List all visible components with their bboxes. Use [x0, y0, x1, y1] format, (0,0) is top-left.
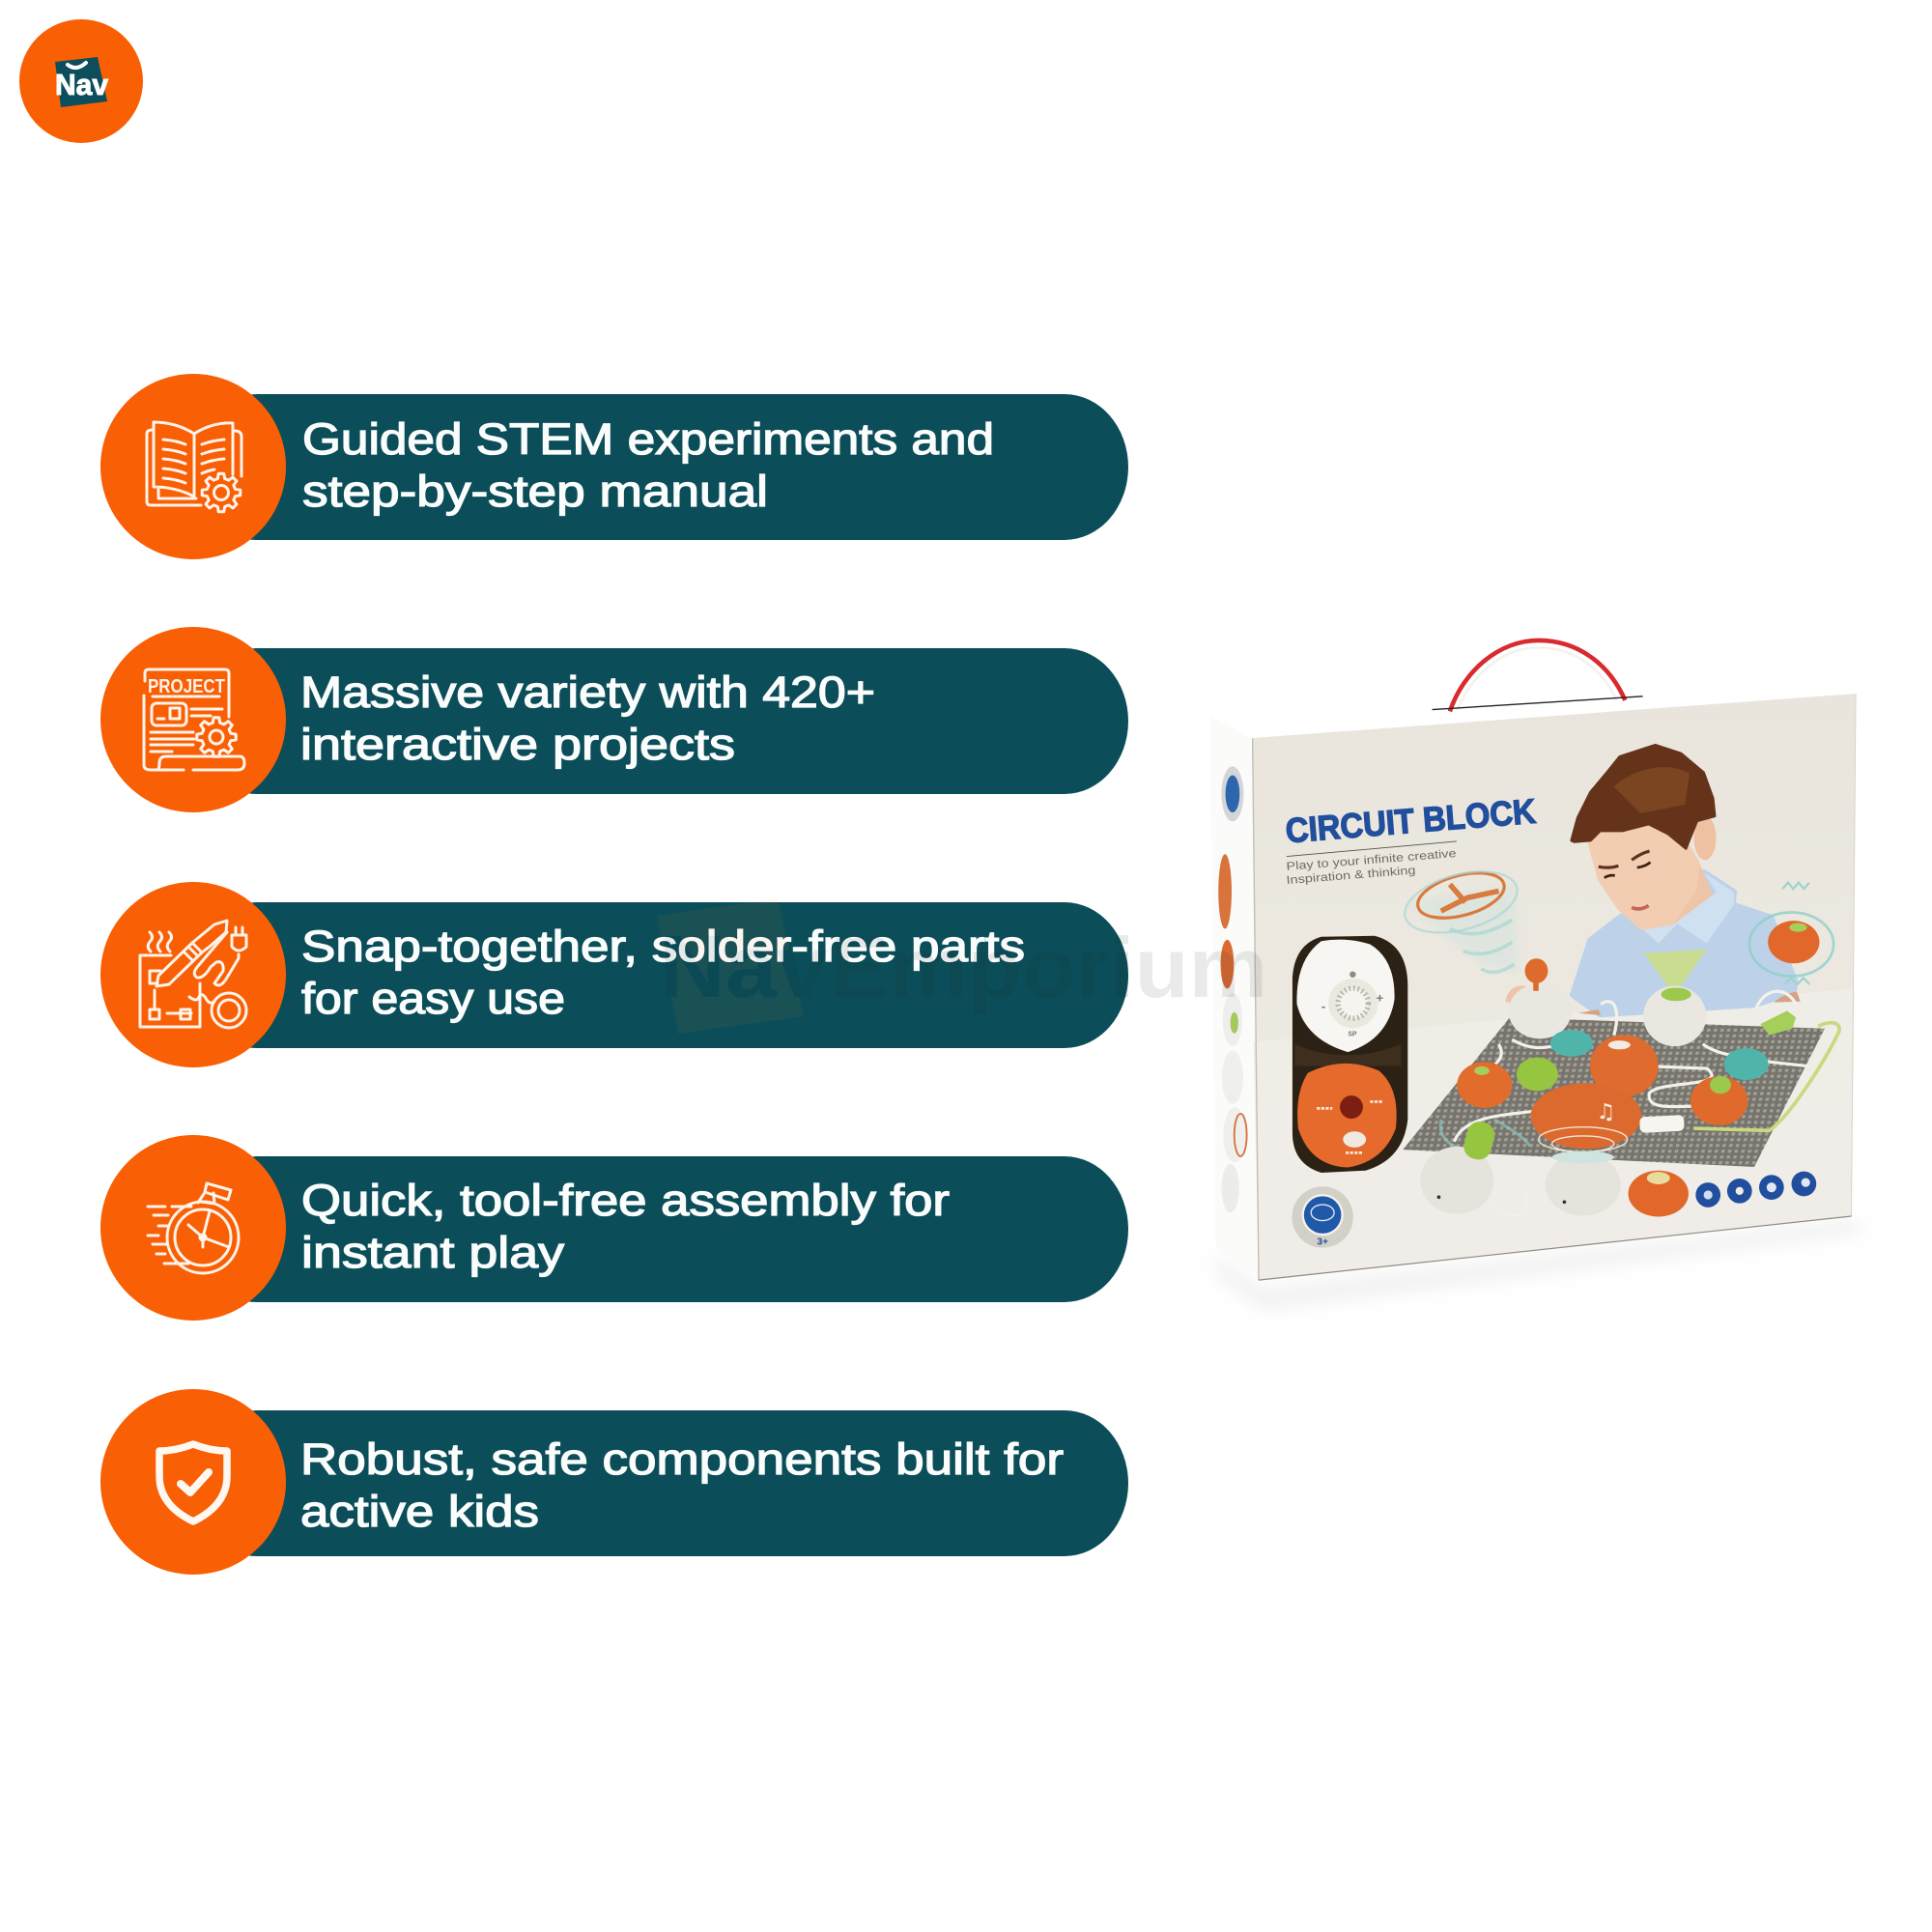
box subtitle: Inspiration & thinking: [1286, 864, 1416, 887]
text 2: [300, 668, 875, 769]
logo badge: Nav: [55, 68, 109, 101]
feature badges: [1695, 1172, 1816, 1208]
box shadow: [1210, 1219, 1867, 1310]
text 1: Guided STEM experiments and: [302, 414, 994, 464]
text 1: [302, 414, 994, 516]
text 2: Massive variety with 420+: [300, 668, 875, 717]
text 1: step-by-step manual: [302, 467, 768, 516]
orange circle 5: [100, 1389, 286, 1575]
icon: stopwatch: [148, 1183, 239, 1273]
boy illustration: [1505, 745, 1801, 1015]
icon: shield with check: [159, 1444, 227, 1521]
text 2: interactive projects: [300, 720, 735, 769]
logo badge: [19, 19, 143, 143]
wires: [1455, 991, 1809, 1142]
box title: CIRCUIT BLOCK: [1284, 792, 1537, 850]
orange circle 4: [100, 1135, 286, 1321]
box window: -: [1321, 999, 1325, 1013]
table surface: [1254, 988, 1855, 1280]
pill 2: [193, 648, 1128, 794]
watermark: Emporium: [830, 920, 1267, 1015]
box subtitle: [1286, 841, 1457, 887]
text 5: Robust, safe components built for: [300, 1435, 1064, 1484]
box window: [1293, 936, 1407, 1173]
toy modules: [1420, 921, 1819, 1216]
text 3: for easy use: [301, 974, 565, 1023]
text 3: Snap-together, solder-free parts: [301, 922, 1025, 971]
box front: [1253, 694, 1856, 1280]
icon: project sheet with gear: PROJECT: [148, 676, 225, 697]
accent swirls: [1398, 861, 1839, 1151]
speaker module: [1296, 940, 1395, 1052]
text 3: [301, 922, 1025, 1023]
box bottom edge: [1259, 1216, 1852, 1280]
age badge: [1292, 1186, 1353, 1248]
circuit base mat: [1403, 1017, 1825, 1167]
toy modules: ♫: [1596, 1100, 1615, 1124]
box window: +: [1377, 991, 1383, 1006]
feature row 3: solder-free parts: [100, 882, 1128, 1067]
box subtitle: Play to your infinite creative: [1286, 846, 1457, 873]
box side panel: [1210, 716, 1259, 1280]
text 5: [300, 1435, 1064, 1536]
product box illustration: [1210, 640, 1867, 1310]
icon: book with gear: [147, 422, 242, 512]
orange donut module: [1297, 1064, 1397, 1167]
pill 4: [193, 1156, 1128, 1302]
pill 5: [193, 1410, 1128, 1556]
watermark: Nav: [659, 918, 828, 1016]
box window: SP: [1348, 1032, 1357, 1038]
orange circle 2: [100, 627, 286, 812]
handle: [1433, 640, 1643, 711]
orange circle 1: [100, 374, 286, 559]
feature row 4: quick assembly: [100, 1135, 1128, 1321]
icon: soldering iron and board: [140, 921, 246, 1028]
text 4: instant play: [301, 1228, 565, 1277]
pill 3: [193, 902, 1128, 1048]
text 4: [301, 1176, 950, 1277]
age badge: 3+: [1317, 1236, 1328, 1247]
feature row 2: variety of projects: [100, 627, 1128, 812]
text 4: Quick, tool-free assembly for: [301, 1176, 950, 1225]
feature row 5: robust and safe: [100, 1389, 1128, 1575]
watermark: [657, 898, 1267, 1034]
feature row 1: guided experiments: [100, 374, 1128, 559]
text 5: active kids: [300, 1487, 539, 1536]
pill 1: [193, 394, 1128, 540]
icon: project sheet with gear: [144, 669, 244, 770]
orange circle 3: [100, 882, 286, 1067]
